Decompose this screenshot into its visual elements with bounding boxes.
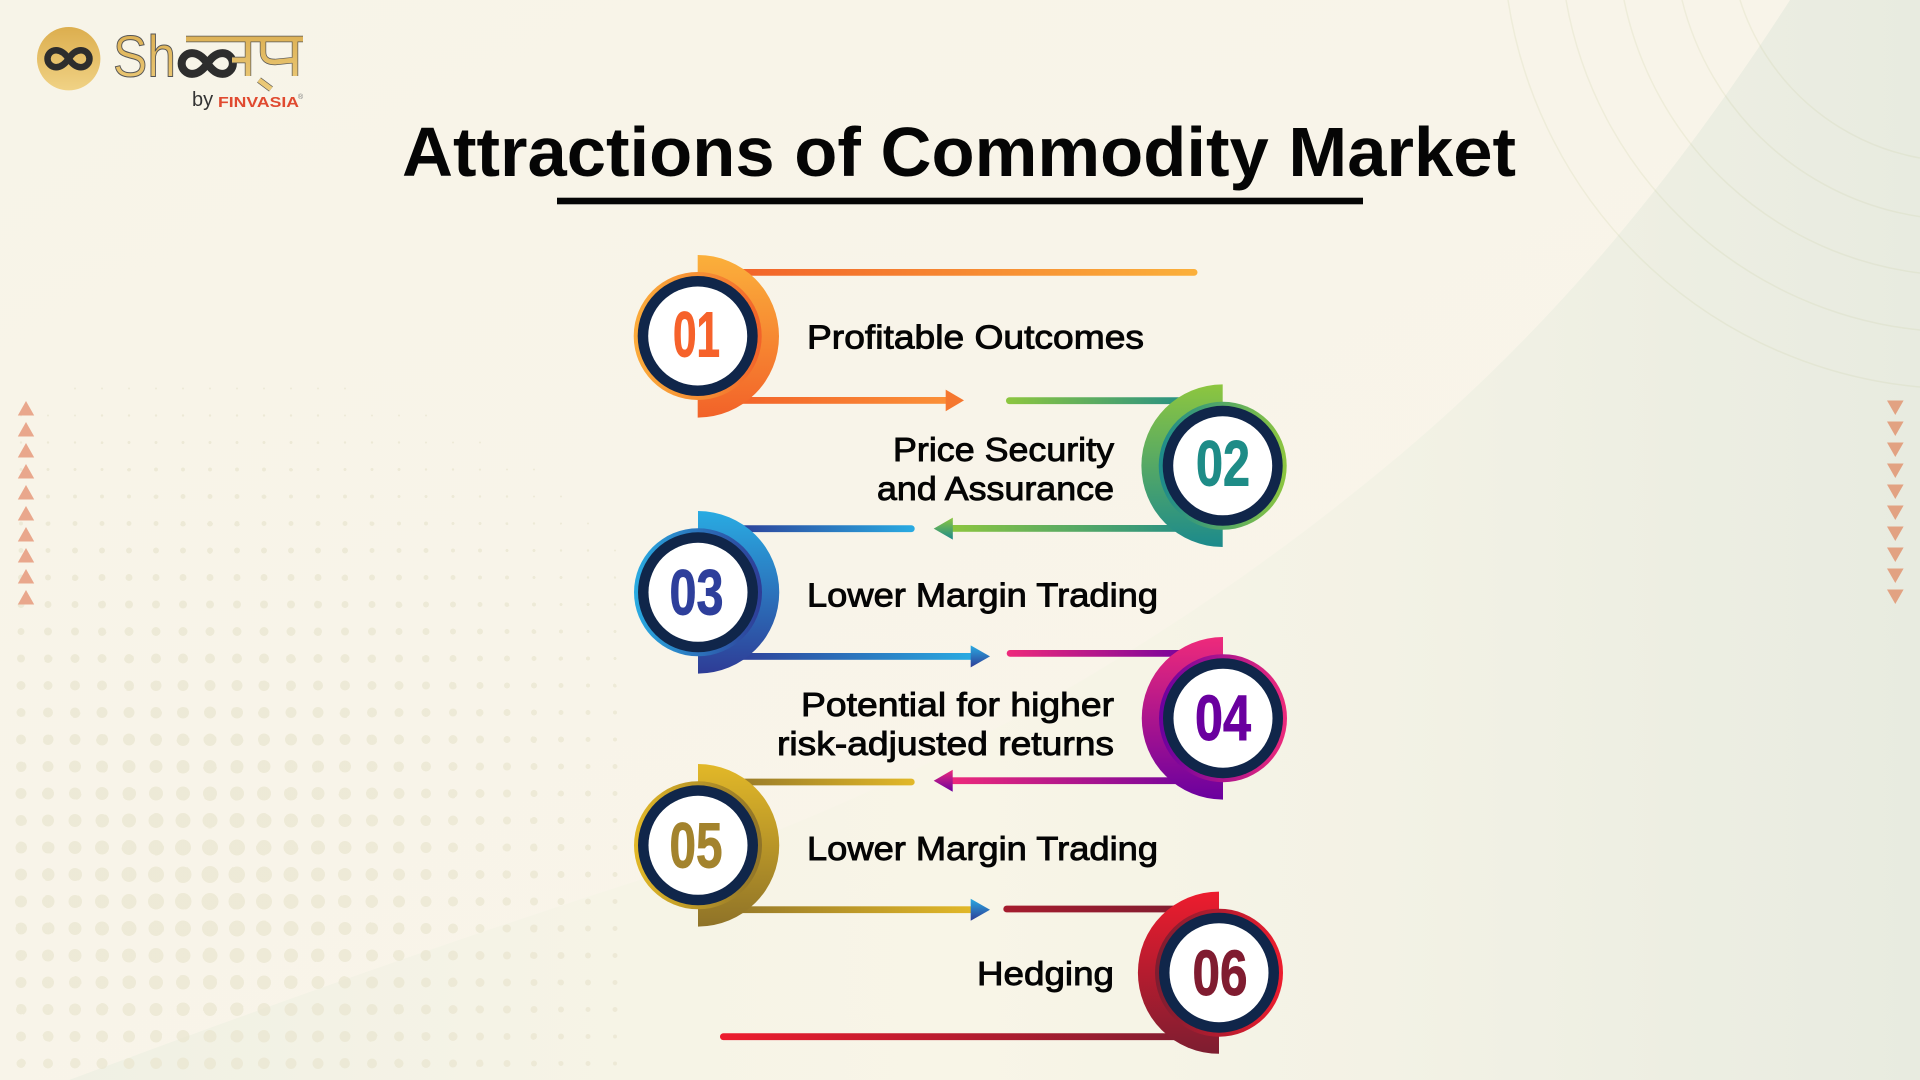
badge — [1159, 654, 1287, 782]
badge: 03 — [670, 556, 724, 628]
step 05: Lower Margin Trading — [634, 764, 1158, 927]
top bar — [730, 525, 915, 532]
half disc — [1142, 637, 1223, 800]
halftone dot field — [15, 388, 618, 1070]
label: Profitable Outcomes — [807, 318, 1144, 355]
logo byline — [192, 89, 304, 111]
label: Lower Margin Trading — [807, 830, 1158, 867]
label — [777, 686, 1114, 762]
bottom arrow — [730, 390, 964, 411]
bottom arrow — [730, 645, 990, 667]
badge — [634, 272, 762, 400]
logo byline: ® — [298, 93, 304, 101]
half disc — [698, 255, 779, 418]
badge: 04 — [1195, 682, 1251, 754]
step 06: Hedging — [720, 892, 1283, 1054]
half disc — [1141, 384, 1223, 547]
logo coin icon — [37, 27, 100, 90]
badge: 01 — [673, 299, 720, 371]
logo wordmark — [113, 24, 303, 90]
logo byline: by — [192, 89, 213, 111]
label: Price Security — [893, 431, 1115, 468]
label: risk-adjusted returns — [777, 725, 1114, 762]
title underline — [557, 198, 1363, 204]
bottom bar — [720, 1033, 1210, 1040]
bottom arrow — [730, 899, 990, 921]
badge: 06 — [1192, 937, 1248, 1009]
bottom arrow — [934, 518, 1210, 540]
label: and Assurance — [877, 470, 1114, 507]
half disc — [698, 764, 779, 927]
half disc — [698, 511, 779, 674]
step 04: Potential for higher risk-adjusted returns — [777, 637, 1287, 800]
logo byline: FINVASIA — [218, 94, 299, 111]
bottom arrow — [934, 770, 1210, 792]
top bar — [1006, 397, 1206, 404]
badge: 02 — [1196, 428, 1250, 500]
badge: 05 — [670, 810, 722, 882]
title: Attractions of Commodity Market — [402, 113, 1516, 191]
step 03: Lower Margin Trading — [634, 511, 1158, 674]
label: Lower Margin Trading — [807, 577, 1158, 614]
top bar — [730, 779, 915, 785]
badge — [1155, 909, 1283, 1037]
badge — [634, 528, 762, 656]
logo: Shoonya by Finvasia — [37, 24, 304, 111]
badge — [1159, 402, 1287, 530]
top bar — [1007, 650, 1207, 657]
right triangle column — [1887, 400, 1904, 604]
left triangle column — [18, 401, 34, 604]
label: Potential for higher — [801, 686, 1114, 723]
step 02: Price Security and Assurance — [877, 384, 1287, 547]
top bar — [730, 269, 1198, 276]
label — [877, 431, 1115, 507]
badge — [634, 781, 762, 909]
step 01: Profitable Outcomes — [634, 255, 1198, 418]
half disc — [1138, 892, 1219, 1054]
logo wordmark: Sh — [113, 24, 176, 90]
label: Hedging — [977, 955, 1114, 992]
top bar — [1003, 906, 1203, 912]
